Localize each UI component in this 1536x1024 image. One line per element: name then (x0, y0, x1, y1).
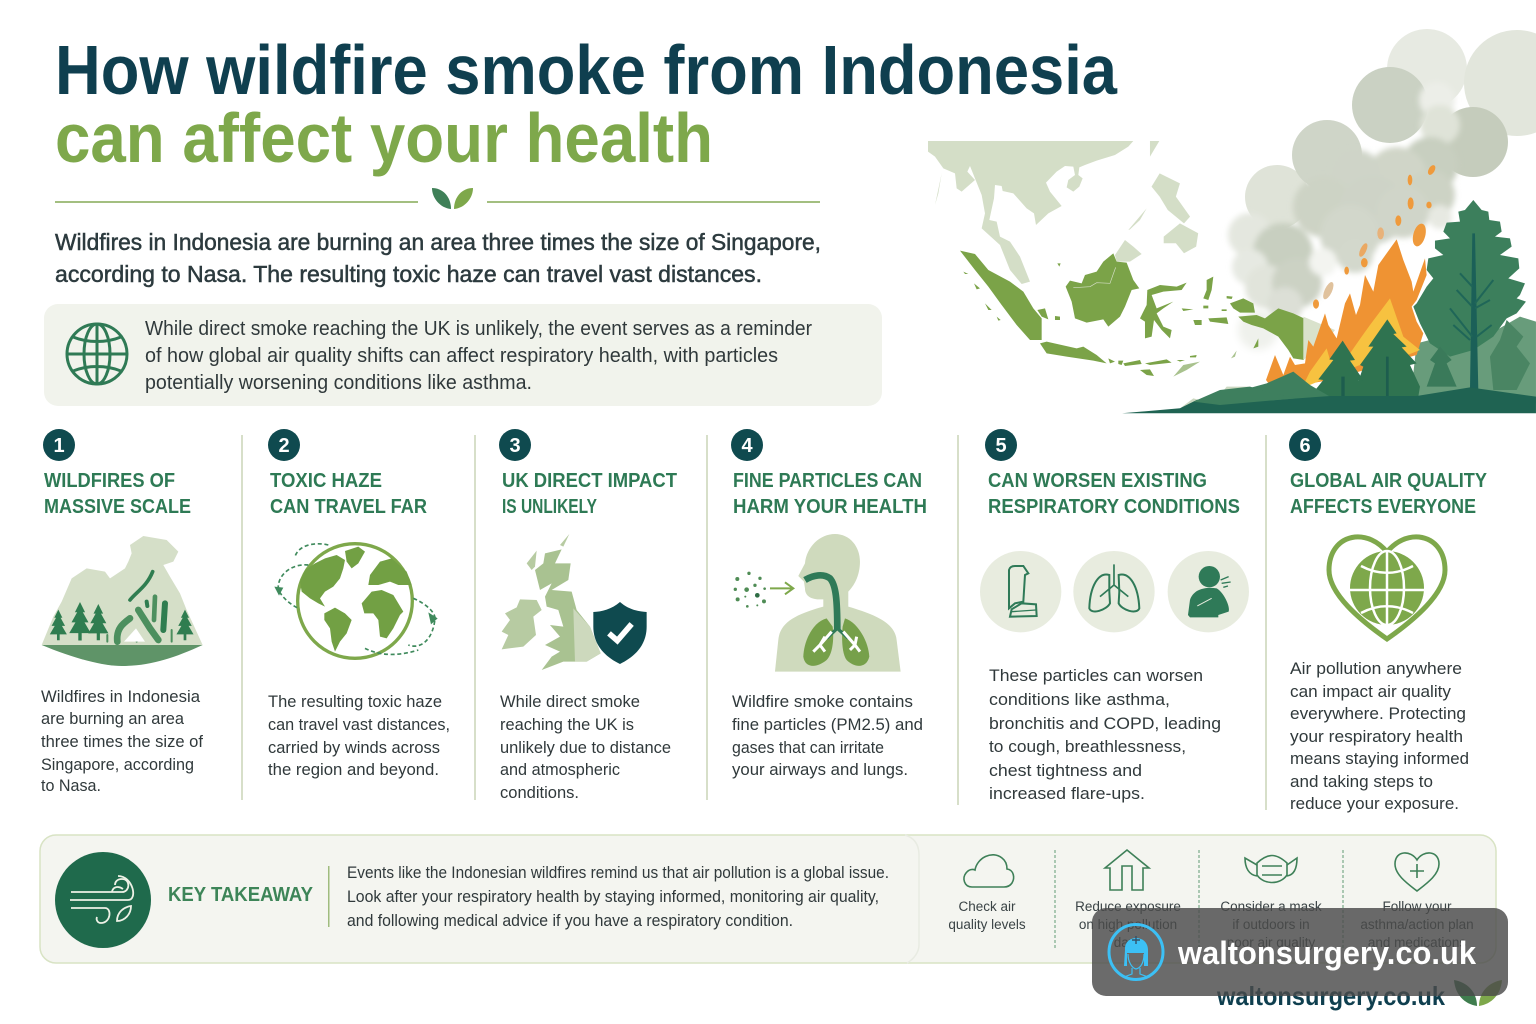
panel: step 6 global air quality affects everyone: your respiratory health (1290, 727, 1463, 746)
panel: step 1 wildfires of massive scale: Wildfires in Indonesia (41, 687, 201, 706)
panel: step 5 can worsen existing respiratory conditions: conditions like asthma, (989, 690, 1170, 709)
panel: step 4 fine particles can harm your health: HARM YOUR HEALTH (733, 496, 927, 518)
map: Indonesia islands (960, 251, 1304, 408)
map: Philippines (1152, 173, 1198, 253)
map: Papua faded edge (1303, 317, 1335, 360)
action: check air quality: Check air (958, 899, 1016, 914)
panel: step 6 global air quality affects everyone: Air pollution anywhere (1290, 659, 1462, 678)
intro text (55, 229, 821, 287)
panel: step 2 toxic haze can travel far: The resulting toxic haze (268, 692, 442, 711)
panel: step 2 toxic haze can travel far (268, 429, 450, 779)
icon: lungs (1073, 551, 1155, 632)
panel: step 1 wildfires of massive scale: Singapore, according (41, 755, 194, 774)
panel: step 1 wildfires of massive scale: MASSIVE SCALE (44, 496, 191, 518)
panel: step 5 can worsen existing respiratory conditions: to cough, breathlessness, (989, 737, 1186, 756)
panel: step 3 UK direct impact is unlikely: reaching the UK is (500, 715, 634, 734)
panel: key takeaway: Look after your respiratory health by staying informed, monitoring air quality, (347, 887, 879, 906)
panel: UK context callout: of how global air quality shifts can affect respiratory health, with particles (145, 345, 778, 367)
action: reduce exposure: Reduce exposure (1075, 899, 1181, 914)
panel: step 6 global air quality affects everyone (1289, 429, 1488, 813)
panel: UK context callout (44, 304, 882, 406)
panel: step 3 UK direct impact is unlikely: While direct smoke (500, 692, 640, 711)
panel: step 5 can worsen existing respiratory conditions: increased flare-ups. (989, 784, 1145, 803)
watermark badge: waltonsurgery.co.uk (1177, 935, 1476, 971)
action: check air quality: quality levels (948, 917, 1026, 932)
action: reduce exposure (1075, 850, 1181, 950)
background forest (1410, 317, 1536, 403)
panel: step 3 UK direct impact is unlikely: IS UNLIKELY (502, 496, 598, 518)
panel: key takeaway: and following medical advice if you have a respiratory condition. (347, 911, 793, 930)
panel: step 4 fine particles can harm your health: Wildfire smoke contains (732, 692, 913, 711)
brand footer: waltonsurgery.co.uk (1216, 981, 1445, 1011)
panel: step 5 can worsen existing respiratory conditions: 5 (995, 435, 1007, 457)
action: consider a mask (1220, 856, 1322, 950)
panel: step 3 UK direct impact is unlikely: 3 (509, 435, 521, 457)
action: reduce exposure: on high pollution (1079, 917, 1177, 932)
panel: step 1 wildfires of massive scale: WILDFIRES OF (44, 470, 175, 492)
ground (1230, 372, 1330, 403)
panel: step 2 toxic haze can travel far: the region and beyond. (268, 760, 439, 779)
big tree (1413, 200, 1526, 357)
action: follow asthma plan: Follow your (1382, 899, 1452, 914)
panel: step 6 global air quality affects everyone: reduce your exposure. (1290, 794, 1459, 813)
panel: step 4 fine particles can harm your health: fine particles (PM2.5) and (732, 715, 923, 734)
panel: step 3 UK direct impact is unlikely: UK DIRECT IMPACT (502, 470, 677, 492)
icon: nurse logo (1109, 924, 1163, 980)
panel: UK context callout: potentially worsening conditions like asthma. (145, 372, 532, 394)
action: consider a mask: poor air quality (1227, 935, 1316, 950)
flames (1266, 239, 1427, 390)
action: consider a mask: if outdoors in (1232, 917, 1310, 932)
action: check air quality (948, 855, 1026, 932)
panel: step 6 global air quality affects everyone: AFFECTS EVERYONE (1290, 496, 1476, 518)
title (55, 31, 1118, 177)
panel: step 6 global air quality affects everyone: can impact air quality (1290, 682, 1451, 701)
panel: step 5 can worsen existing respiratory conditions (980, 429, 1249, 803)
panel: step 6 global air quality affects everyone: GLOBAL AIR QUALITY (1290, 470, 1488, 492)
panel: step 2 toxic haze can travel far: CAN TRAVEL FAR (270, 496, 427, 518)
panel: step 6 global air quality affects everyone: and taking steps to (1290, 772, 1433, 791)
small conifers (1353, 319, 1420, 397)
illustration: forest fire (1122, 164, 1536, 413)
panel: step 6 global air quality affects everyone: 6 (1299, 435, 1311, 457)
panel: step 3 UK direct impact is unlikely (499, 429, 677, 802)
action: follow asthma plan: and medications (1368, 935, 1466, 950)
panel: step 2 toxic haze can travel far: TOXIC HAZE (270, 470, 382, 492)
panel: UK context callout: While direct smoke reaching the UK is unlikely, the event serves as a reminder (145, 318, 812, 340)
icon: wind and leaf badge (55, 852, 151, 948)
panel: key takeaway (40, 835, 1496, 963)
panel: step 2 toxic haze can travel far: can travel vast distances, (268, 715, 450, 734)
icon: heart with globe (1329, 537, 1445, 639)
action: follow asthma plan (1360, 853, 1474, 950)
icon: forest fire (42, 536, 203, 666)
panel: step 4 fine particles can harm your health (731, 429, 927, 779)
title: can affect your health (55, 99, 713, 177)
watermark badge (1092, 908, 1508, 996)
panel: step 1 wildfires of massive scale: are burning an area (41, 709, 185, 728)
panel: step 4 fine particles can harm your health: FINE PARTICLES CAN (733, 470, 922, 492)
intro text: Wildfires in Indonesia are burning an area three times the size of Singapore, (55, 229, 821, 255)
panel: step 5 can worsen existing respiratory conditions: chest tightness and (989, 761, 1142, 780)
panel: step 2 toxic haze can travel far: 2 (278, 435, 290, 457)
panel: step 4 fine particles can harm your health: 4 (741, 435, 753, 457)
panel: step 3 UK direct impact is unlikely: unlikely due to distance (500, 738, 671, 757)
panel: step 5 can worsen existing respiratory conditions: CAN WORSEN EXISTING (988, 470, 1207, 492)
panel: step 3 UK direct impact is unlikely: conditions. (500, 783, 579, 802)
panel: step 5 can worsen existing respiratory conditions: These particles can worsen (989, 666, 1203, 685)
panel: step 6 global air quality affects everyone: everywhere. Protecting (1290, 704, 1466, 723)
panel: key takeaway: KEY TAKEAWAY (168, 884, 314, 906)
icon: person breathing particles (734, 534, 901, 672)
icon: globe with wind arrows (274, 544, 438, 658)
icon: globe (67, 324, 127, 384)
icon: inhaler (980, 551, 1061, 632)
panel: key takeaway: Events like the Indonesian wildfires remind us that air pollution is a global issue. (347, 863, 889, 882)
title divider with leaf icon (55, 188, 820, 209)
panel: step 1 wildfires of massive scale (41, 429, 203, 795)
action: consider a mask: Consider a mask (1220, 899, 1322, 914)
icon: person coughing (1168, 551, 1249, 632)
icon: UK map with shield (502, 534, 647, 670)
title: How wildfire smoke from Indonesia (55, 31, 1118, 109)
map: Southeast Asia mainland (928, 141, 1159, 284)
intro text: according to Nasa. The resulting toxic haze can travel vast distances. (55, 261, 762, 287)
panel: step 4 fine particles can harm your health: gases that can irritate (732, 738, 884, 757)
panel: step 4 fine particles can harm your health: your airways and lungs. (732, 760, 908, 779)
column dividers (241, 435, 1267, 810)
darker mid tree (1490, 320, 1530, 390)
panel: step 3 UK direct impact is unlikely: and atmospheric (500, 760, 620, 779)
action: follow asthma plan: asthma/action plan (1360, 917, 1474, 932)
panel: step 1 wildfires of massive scale: three times the size of (41, 732, 203, 751)
panel: step 5 can worsen existing respiratory conditions: bronchitis and COPD, leading (989, 714, 1221, 733)
panel: step 1 wildfires of massive scale: 1 (53, 435, 65, 457)
panel: step 2 toxic haze can travel far: carried by winds across (268, 738, 440, 757)
action: reduce exposure: days (1114, 935, 1143, 950)
illustration: smoke plume (1228, 29, 1536, 350)
panel: step 1 wildfires of massive scale: to Nasa. (41, 776, 101, 795)
panel: step 6 global air quality affects everyone: means staying informed (1290, 749, 1469, 768)
panel: step 5 can worsen existing respiratory conditions: RESPIRATORY CONDITIONS (988, 496, 1240, 518)
